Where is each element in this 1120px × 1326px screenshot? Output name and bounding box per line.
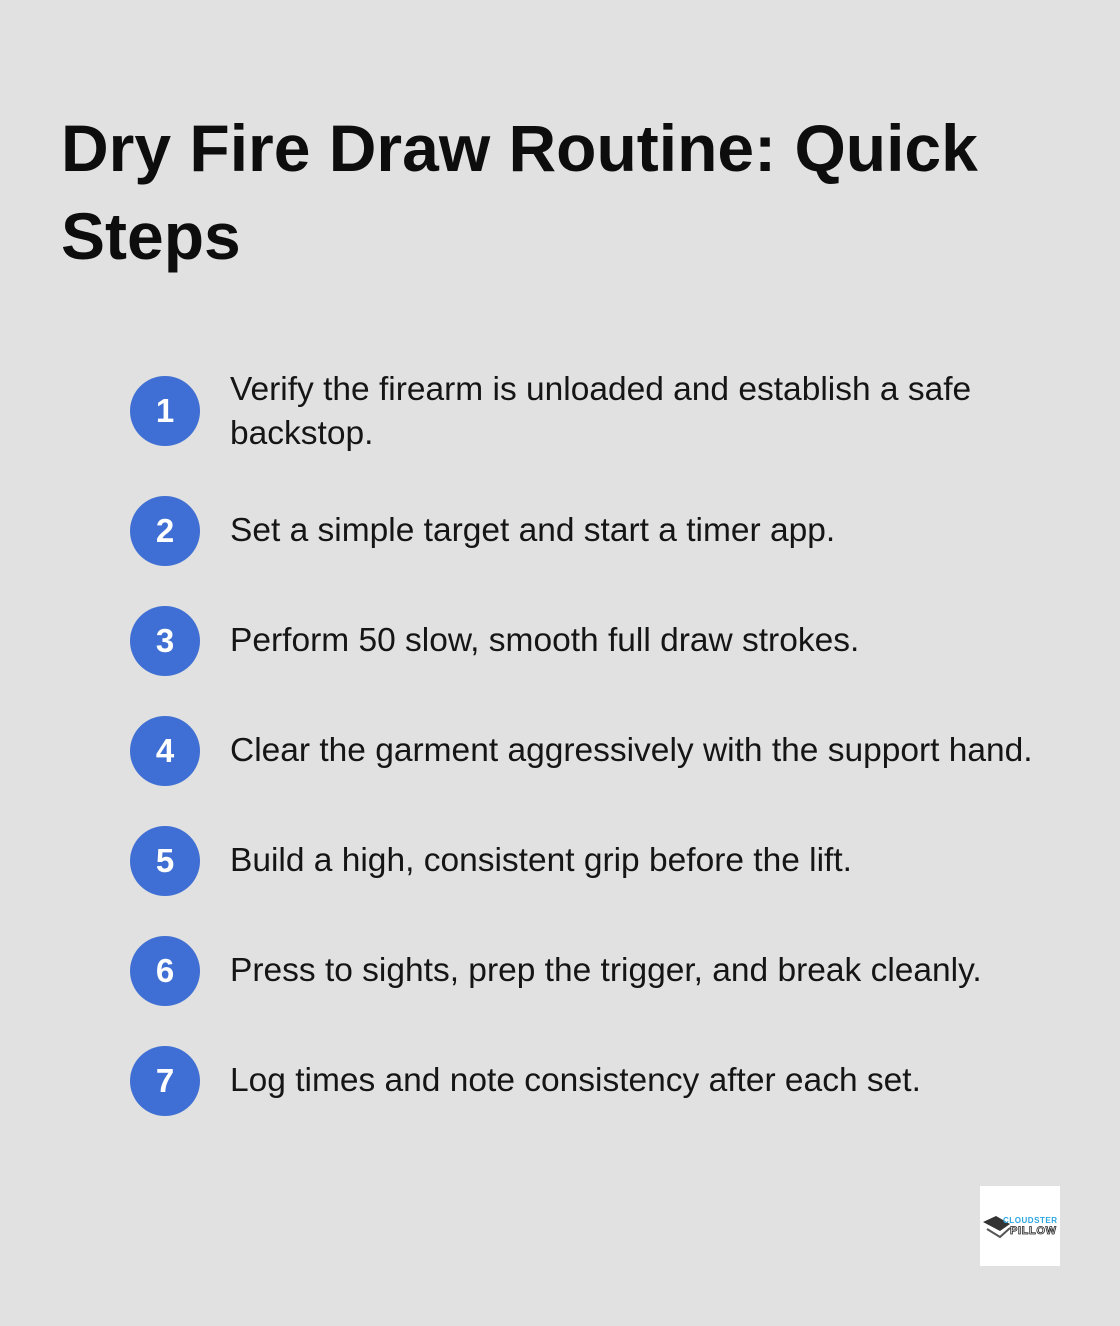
- step 2: Set a simple target and start a timer app.: [230, 512, 835, 549]
- step 1: 1: [156, 392, 174, 429]
- step 5: [130, 826, 852, 896]
- step 4: Clear the garment aggressively with the support hand.: [230, 732, 1033, 769]
- step 4: 4: [156, 732, 174, 769]
- step 6: Press to sights, prep the trigger, and break cleanly.: [230, 952, 982, 989]
- step 1: Verify the firearm is unloaded and establish a safe backstop.: [230, 371, 971, 452]
- step 3: 3: [156, 622, 174, 659]
- step 2: [130, 496, 835, 566]
- step 7: 7: [156, 1062, 174, 1099]
- step 6: 6: [156, 952, 174, 989]
- step 3: [130, 606, 859, 676]
- title: Dry Fire Draw Routine: Quick Steps: [61, 111, 978, 273]
- step 5: 5: [156, 842, 174, 879]
- step 6: [130, 936, 982, 1006]
- step 4: [130, 716, 1033, 786]
- logo: CLOUDSTER: [1003, 1216, 1057, 1225]
- step 3: Perform 50 slow, smooth full draw strokes.: [230, 622, 859, 659]
- logo: [980, 1186, 1060, 1266]
- step 7: Log times and note consistency after each set.: [230, 1062, 921, 1099]
- step 7: [130, 1046, 921, 1116]
- logo: PILLOW: [1010, 1225, 1057, 1237]
- step 5: Build a high, consistent grip before the lift.: [230, 842, 852, 879]
- step 2: 2: [156, 512, 174, 549]
